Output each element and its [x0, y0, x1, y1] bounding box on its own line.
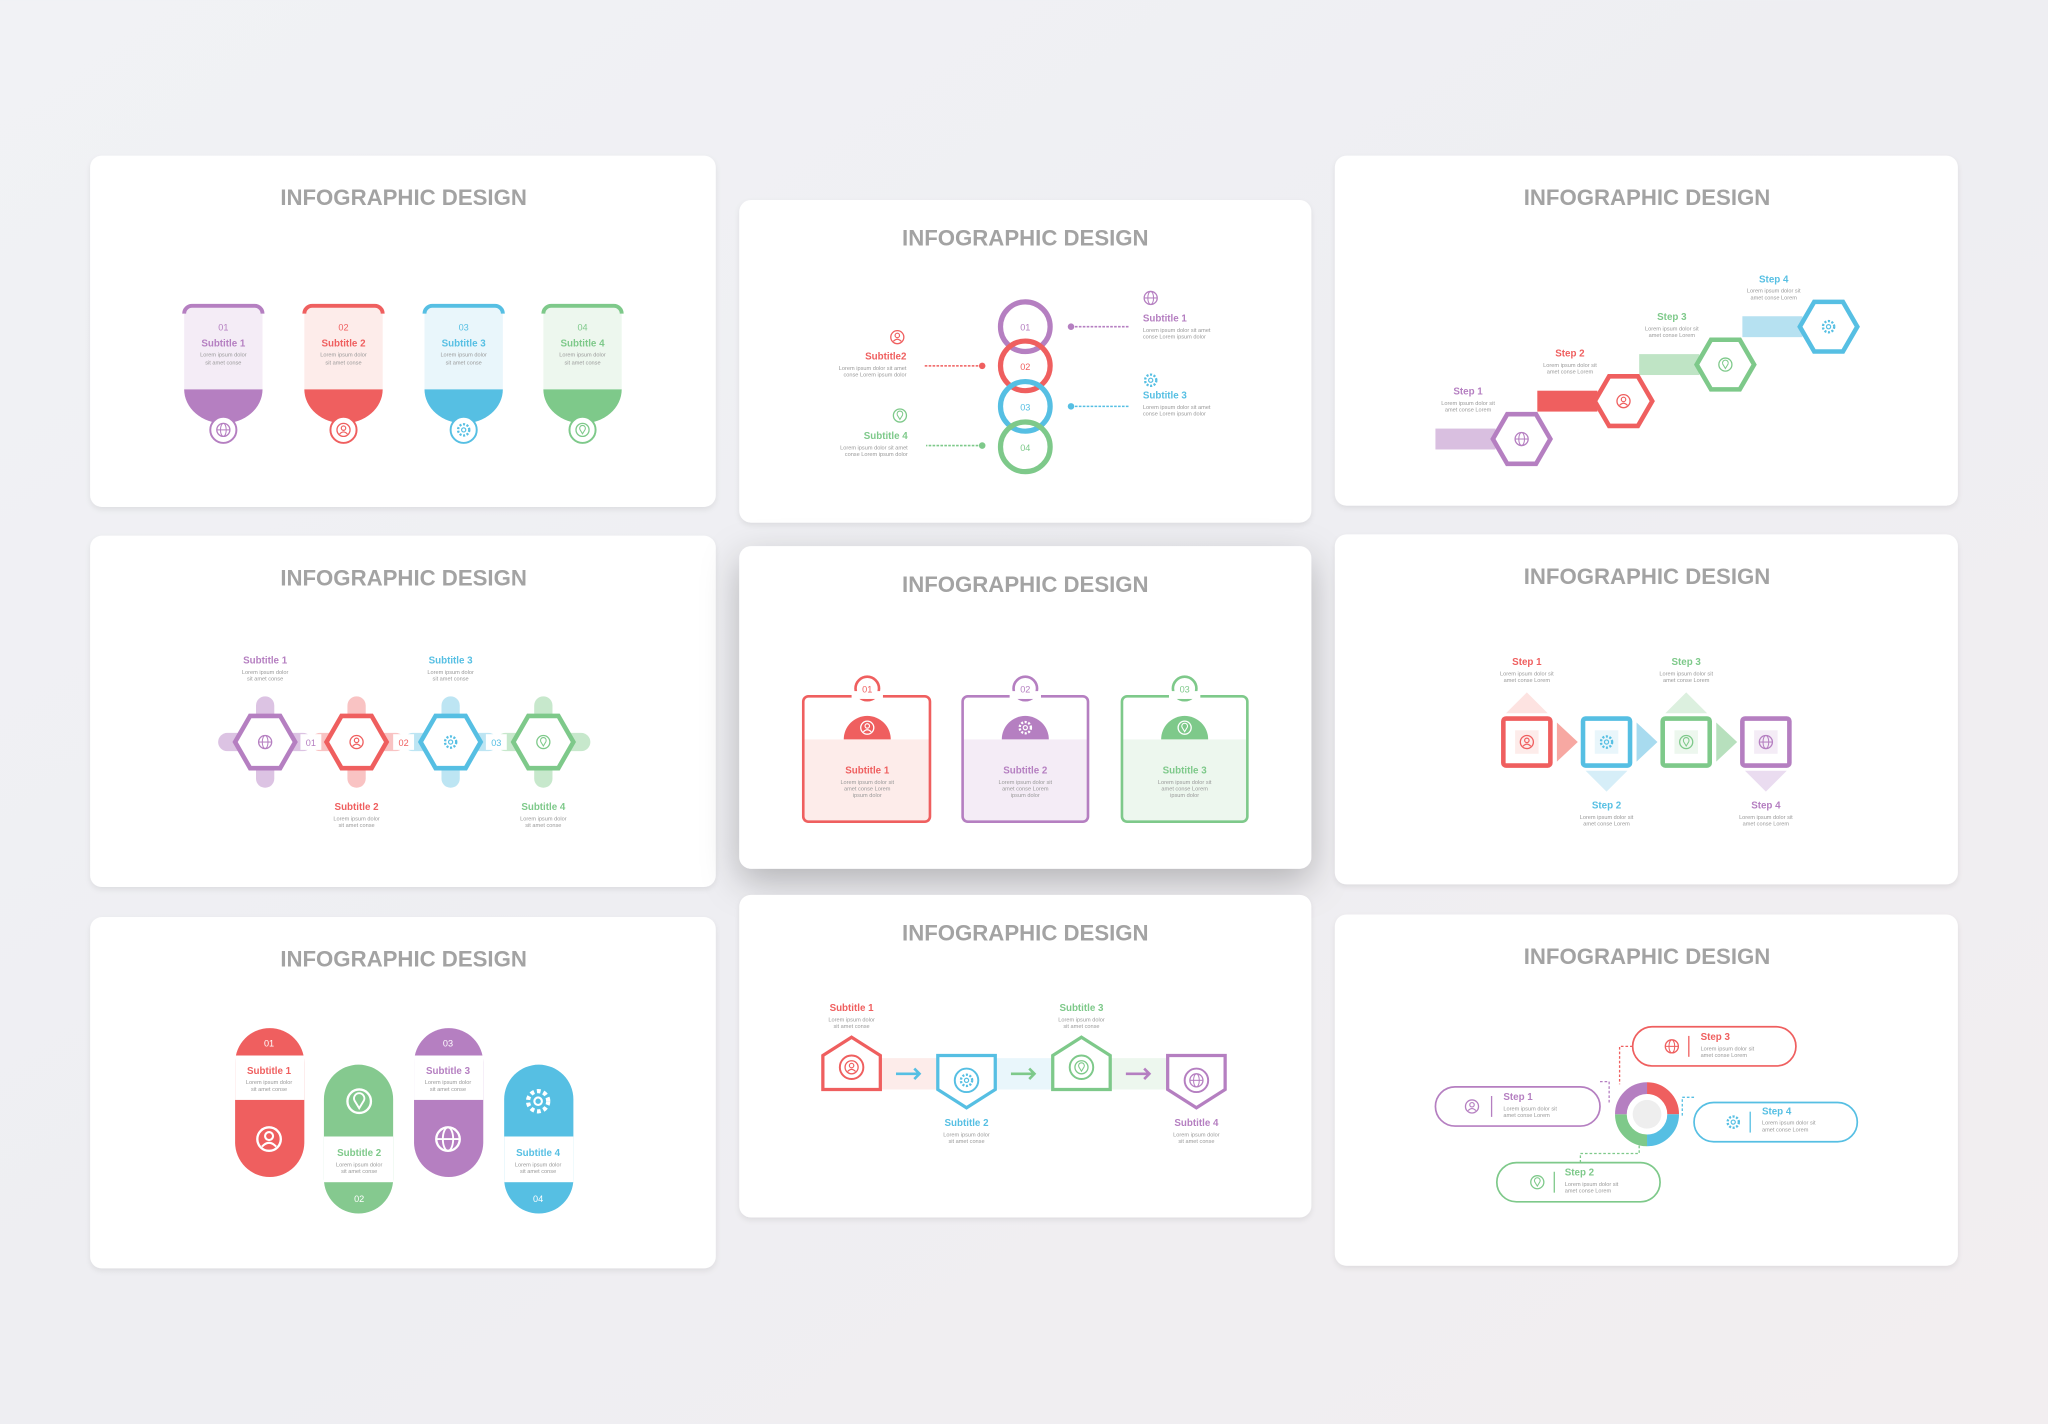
pill: step 1 [1435, 1087, 1600, 1126]
box 2 [963, 677, 1088, 822]
panel: card 2 rings [739, 200, 1311, 523]
pill: step 1: Lorem ipsum dolor sit [1503, 1106, 1557, 1112]
pill: step 1: amet conse Lorem [1503, 1113, 1550, 1119]
panel: card 4 hex crosses: Lorem ipsum dolor [242, 670, 289, 676]
panel: card 6 squares: amet conse Lorem [1504, 678, 1550, 684]
pill 3: sit amet conse [430, 1087, 466, 1093]
hexagons [235, 716, 573, 768]
tag 2: sit amet conse [325, 361, 362, 367]
panel: card 6 squares: amet conse Lorem [1743, 822, 1789, 828]
pill: step 3 [1633, 1027, 1796, 1066]
pill 2: Lorem ipsum dolor [336, 1163, 383, 1169]
dashed connectors [1580, 1046, 1694, 1163]
tag 4 [543, 306, 622, 443]
panel: card 6 squares: Lorem ipsum dolor sit [1739, 815, 1793, 821]
labels: conse Lorem ipsum dolor [843, 372, 907, 378]
pill 3: Lorem ipsum dolor [425, 1080, 471, 1086]
panel: card 4 hex crosses: sit amet conse [338, 823, 375, 829]
bars [1435, 429, 1496, 449]
labels: Lorem ipsum dolor sit amet [1143, 328, 1211, 334]
panel: card 6 squares [1335, 534, 1958, 884]
panel: card 4 hex crosses: Lorem ipsum dolor [333, 816, 380, 822]
pill: step 2: amet conse Lorem [1565, 1189, 1612, 1195]
pill 1: Subtitle 1 [247, 1066, 292, 1077]
tag 3 [424, 306, 503, 443]
panel: card 8 houses: sit amet conse [1063, 1024, 1100, 1030]
panel: card 4 hex crosses: sit amet conse [433, 677, 469, 683]
box 2: Lorem ipsum dolor sit [998, 780, 1053, 786]
labels: conse Lorem ipsum dolor [1143, 412, 1206, 418]
tag 1: sit amet conse [205, 361, 241, 367]
panel: card 4 hex crosses: sit amet conse [525, 823, 561, 829]
tag 4: sit amet conse [564, 361, 601, 367]
box 3: amet conse Lorem [1161, 786, 1208, 792]
houses [823, 1037, 1225, 1108]
tag 4: Lorem ipsum dolor [559, 353, 606, 359]
panel: card 6 squares: Step 2 [1592, 801, 1622, 812]
box 2: amet conse Lorem [1002, 786, 1049, 792]
panel: card 8 houses [739, 895, 1311, 1217]
pill: step 4: Lorem ipsum dolor sit [1762, 1121, 1816, 1127]
labels: Subtitle 1 [1143, 313, 1187, 324]
tag 3: Subtitle 3 [442, 338, 486, 349]
pill: step 2: Lorem ipsum dolor sit [1565, 1182, 1619, 1188]
panel: card 7 pills [90, 917, 716, 1268]
tag 2: Subtitle 2 [321, 338, 366, 349]
panel: card 8 houses: Lorem ipsum dolor [1058, 1018, 1105, 1024]
panel: card 6 squares: Step 4 [1751, 801, 1781, 812]
title: INFOGRAPHIC DESIGN [1524, 944, 1770, 969]
squares [1503, 719, 1789, 766]
panel: card 3 hex steps: Step 4 [1759, 274, 1789, 285]
box 2: ipsum dolor [1011, 793, 1040, 799]
pill 1: Lorem ipsum dolor [246, 1080, 292, 1086]
panel: card 4 hex crosses: Lorem ipsum dolor [427, 670, 474, 676]
labels: Step 1 [1453, 387, 1483, 398]
box 2: 02 [1020, 684, 1030, 694]
ring chain: 04 [1020, 443, 1030, 453]
panel: card 8 houses: sit amet conse [948, 1139, 985, 1145]
box 3 [1122, 677, 1247, 822]
tag 3: sit amet conse [446, 361, 482, 367]
tag 1: Subtitle 1 [201, 338, 246, 349]
labels: conse Lorem ipsum dolor [845, 452, 908, 458]
pill 2: sit amet conse [341, 1169, 377, 1175]
panel: card 4 hex crosses: 03 [491, 738, 501, 748]
labels: Subtitle 4 [864, 431, 908, 442]
panel: card 8 houses: Subtitle 3 [1059, 1003, 1104, 1014]
tag 3: Lorem ipsum dolor [440, 353, 487, 359]
pill: step 1: Step 1 [1503, 1092, 1533, 1103]
pill: step 3: Lorem ipsum dolor sit [1701, 1046, 1755, 1052]
panel: card 8 houses: sit amet conse [834, 1024, 870, 1030]
box 1: amet conse Lorem [844, 786, 891, 792]
panel: card 3 hex steps: amet conse Lorem [1445, 408, 1492, 414]
panel: card 4 hex crosses [90, 536, 716, 887]
box 2: Subtitle 2 [1003, 765, 1048, 776]
title: INFOGRAPHIC DESIGN [1524, 185, 1770, 210]
panel: card 4 hex crosses: Subtitle 2 [335, 802, 379, 813]
pill 3: 03 [443, 1038, 453, 1048]
labels: conse Lorem ipsum dolor [1143, 334, 1206, 340]
pill: step 4: Step 4 [1762, 1106, 1792, 1117]
labels [839, 291, 1211, 458]
pill 2: Subtitle 2 [337, 1148, 382, 1159]
panel: card 3 hex steps: Lorem ipsum dolor sit [1441, 401, 1495, 407]
box 3: Lorem ipsum dolor sit [1158, 780, 1212, 786]
panel: card 4 hex crosses: Subtitle 3 [429, 656, 473, 667]
labels: Subtitle 3 [1143, 391, 1187, 402]
ring chain: 01 [1020, 323, 1030, 333]
title: INFOGRAPHIC DESIGN [902, 921, 1149, 946]
pill: step 2: Step 2 [1565, 1168, 1595, 1179]
pill 4 [504, 1065, 573, 1214]
panel: card 4 hex crosses: sit amet conse [247, 677, 283, 683]
title: INFOGRAPHIC DESIGN [280, 947, 527, 972]
title: INFOGRAPHIC DESIGN [280, 185, 527, 210]
pill 3: Subtitle 3 [426, 1066, 471, 1077]
panel: card 8 houses: Lorem ipsum dolor [828, 1018, 875, 1024]
labels: Lorem ipsum dolor sit amet [839, 366, 907, 372]
box 1: ipsum dolor [853, 793, 882, 799]
panel: card 6 squares: Lorem ipsum dolor sit [1659, 671, 1713, 677]
numbers [300, 734, 321, 750]
title: INFOGRAPHIC DESIGN [902, 572, 1149, 597]
box 1: Subtitle 1 [845, 765, 890, 776]
panel: card 3 hex steps [1335, 156, 1958, 506]
pill 1 [235, 1028, 304, 1177]
ring chain [1000, 302, 1050, 472]
panel: card 6 squares: Lorem ipsum dolor sit [1580, 815, 1634, 821]
center ring [1621, 1088, 1673, 1140]
labels: Subtitle2 [865, 351, 907, 362]
bands and arrows [880, 1058, 938, 1089]
box 3: 03 [1180, 684, 1190, 694]
panel: card 8 houses: Lorem ipsum dolor [943, 1132, 990, 1138]
panel: card 3 hex steps: Step 3 [1657, 312, 1687, 323]
pill: step 4: amet conse Lorem [1762, 1127, 1809, 1133]
panel: card 6 squares: amet conse Lorem [1583, 822, 1630, 828]
tag 2: Lorem ipsum dolor [320, 353, 367, 359]
labels: Lorem ipsum dolor sit amet [1143, 405, 1211, 411]
pill 1: 01 [264, 1038, 274, 1048]
tag 2: 02 [338, 323, 349, 333]
pill: step 3: Step 3 [1701, 1032, 1730, 1043]
labels: Subtitle 1 [243, 656, 288, 667]
panel: card 3 hex steps: Lorem ipsum dolor sit [1543, 363, 1597, 369]
panel: card 4 hex crosses: Subtitle 4 [521, 802, 566, 813]
pill 4: sit amet conse [520, 1169, 556, 1175]
panel: card 8 houses: Subtitle 2 [945, 1118, 989, 1129]
pale diamonds [1506, 692, 1548, 713]
panel: card 3 hex steps: amet conse Lorem [1750, 295, 1797, 301]
panel: card 4 hex crosses: Lorem ipsum dolor [520, 816, 567, 822]
tag 1: Lorem ipsum dolor [200, 353, 247, 359]
tag 2 [304, 306, 383, 443]
pill 4: Subtitle 4 [516, 1148, 561, 1159]
box 3: Subtitle 3 [1163, 765, 1207, 776]
box 3: ipsum dolor [1170, 793, 1199, 799]
box 1 [803, 677, 930, 822]
tag 4: 04 [577, 323, 588, 333]
pill 4: 04 [533, 1194, 543, 1204]
box 1: Lorem ipsum dolor sit [840, 780, 895, 786]
panel: card 3 hex steps: amet conse Lorem [1649, 333, 1695, 339]
panel: card 6 squares: amet conse Lorem [1663, 678, 1710, 684]
panel: card 5 boxes [739, 546, 1311, 869]
pill: step 2 [1497, 1163, 1660, 1202]
arrows [923, 323, 1128, 449]
panel: card 6 squares: Step 3 [1672, 657, 1701, 668]
panel: card 3 hex steps: Lorem ipsum dolor sit [1645, 327, 1699, 333]
title: INFOGRAPHIC DESIGN [1524, 564, 1770, 589]
panel: card 1 tags [90, 156, 716, 507]
panel: card 9 cycle [1335, 914, 1958, 1266]
labels: Subtitle 1 [830, 1003, 874, 1014]
title: INFOGRAPHIC DESIGN [280, 565, 527, 590]
panel: card 3 hex steps: amet conse Lorem [1547, 370, 1594, 376]
labels: Step 1 [1512, 657, 1542, 668]
panel: card 3 hex steps: Step 2 [1555, 349, 1585, 360]
hexagons [1493, 302, 1857, 464]
panel: card 8 houses: Lorem ipsum dolor [1173, 1132, 1220, 1138]
pill 3 [414, 1028, 483, 1177]
pill 4: Lorem ipsum dolor [515, 1163, 561, 1169]
panel: card 4 hex crosses: 01 [306, 738, 316, 748]
title: INFOGRAPHIC DESIGN [902, 226, 1149, 251]
labels: Lorem ipsum dolor sit amet [840, 445, 908, 451]
tag 4: Subtitle 4 [561, 338, 605, 349]
crosses [218, 696, 590, 788]
pill 2 [324, 1065, 393, 1214]
pill: step 4 [1694, 1103, 1857, 1142]
panel: card 8 houses: sit amet conse [1178, 1139, 1214, 1145]
panel: card 8 houses: Subtitle 4 [1174, 1118, 1219, 1129]
panel: card 4 hex crosses: 02 [399, 738, 409, 748]
tag 1: 01 [218, 323, 228, 333]
pill: step 3: amet conse Lorem [1701, 1053, 1747, 1059]
box 1: 01 [862, 684, 872, 694]
pill 1: sit amet conse [251, 1087, 287, 1093]
connector triangles [1557, 722, 1578, 762]
tag 1 [184, 306, 263, 443]
panel: card 3 hex steps: Lorem ipsum dolor sit [1747, 289, 1801, 295]
ring chain: 02 [1020, 362, 1030, 372]
panel: card 6 squares: Lorem ipsum dolor sit [1500, 671, 1554, 677]
pill 2: 02 [354, 1194, 364, 1204]
tag 3: 03 [459, 323, 469, 333]
ring chain: 03 [1020, 402, 1030, 412]
